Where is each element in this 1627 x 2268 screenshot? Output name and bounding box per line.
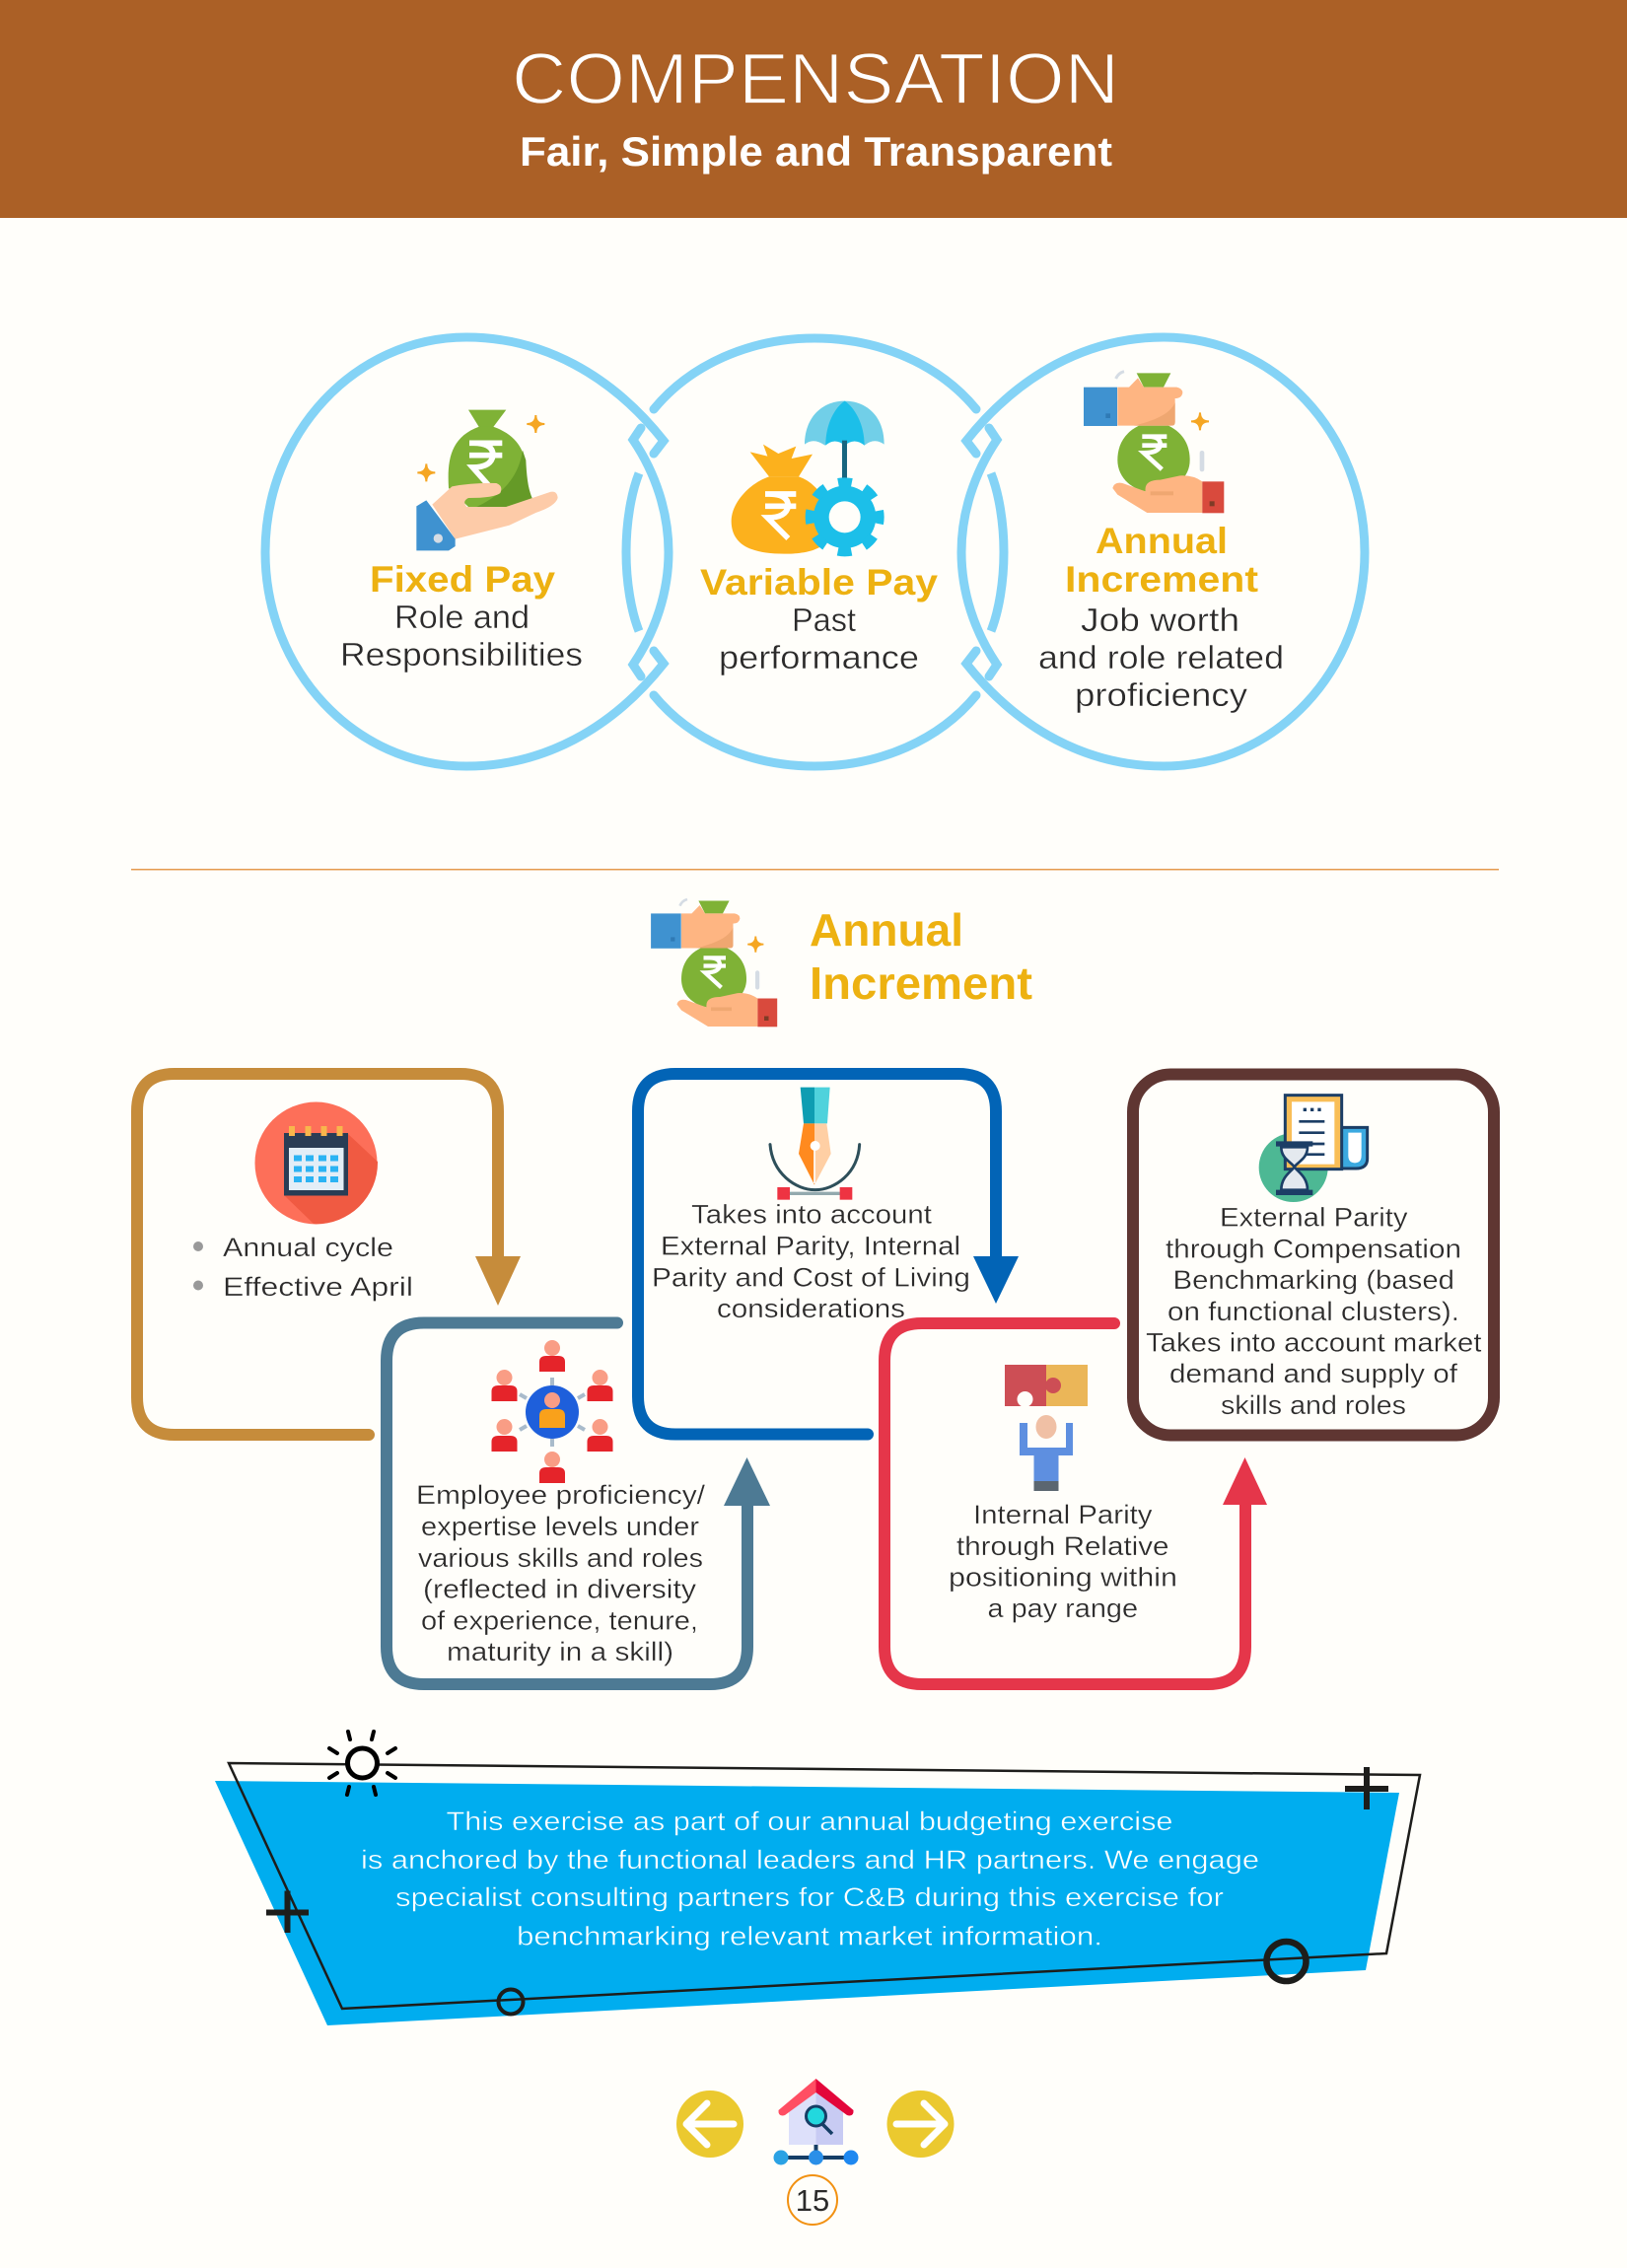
icon: hand holding money bag: [416, 410, 558, 550]
external parity text: through Compensation: [1166, 1235, 1461, 1264]
external parity text: Benchmarking (based: [1173, 1265, 1454, 1295]
bullets: [193, 1233, 413, 1302]
fixed pay text: [340, 559, 583, 673]
interlocked pay component rings: [265, 337, 1365, 766]
proficiency text: of experience, tenure,: [421, 1605, 698, 1635]
plus marks and rings: [266, 1767, 1388, 2014]
variable pay text: [700, 562, 938, 675]
external parity text: demand and supply of: [1169, 1359, 1458, 1388]
external parity text: [1146, 1203, 1482, 1420]
callout text: specialist consulting partners for C&B during this exercise for: [395, 1882, 1224, 1912]
ring: variable pay: [626, 338, 1004, 766]
proficiency text: Employee proficiency/: [416, 1480, 706, 1510]
icon: home: [773, 2079, 858, 2165]
title: COMPENSATION: [512, 39, 1119, 119]
callout text: is anchored by the functional leaders and HR partners. We engage: [361, 1845, 1259, 1875]
variable pay text: Variable Pay: [700, 562, 938, 602]
considerations text: considerations: [717, 1294, 905, 1323]
icon: annual increment heading: [651, 899, 777, 1027]
icon: money bag, umbrella and gear: [732, 401, 884, 554]
panel: internal parity: [884, 1323, 1267, 1684]
icon: calendar: [254, 1102, 378, 1225]
annual increment text: proficiency: [1075, 676, 1248, 713]
icon: person holding puzzle: [1005, 1365, 1088, 1491]
external parity text: External Parity: [1220, 1203, 1408, 1233]
arrow: blue frame: [638, 1074, 996, 1434]
icon: pen nib: [770, 1088, 860, 1200]
external parity text: skills and roles: [1221, 1390, 1406, 1420]
arrow: red frame: [884, 1323, 1245, 1684]
considerations text: External Parity, Internal: [661, 1231, 960, 1260]
proficiency text: (reflected in diversity: [423, 1574, 697, 1603]
icon: next arrow: [887, 2091, 955, 2158]
annual increment text: Annual: [1096, 521, 1228, 561]
icon: people network: [491, 1340, 613, 1483]
arrow: tan frame into proficiency: [137, 1074, 498, 1435]
callout text: [361, 1807, 1259, 1950]
proficiency text: expertise levels under: [421, 1512, 699, 1541]
proficiency text: [416, 1480, 706, 1666]
annual increment text: and role related: [1038, 639, 1284, 675]
callout text: This exercise as part of our annual budgeting exercise: [446, 1807, 1173, 1836]
panel: employee proficiency: [387, 1323, 770, 1684]
proficiency text: maturity in a skill): [447, 1637, 673, 1666]
fixed pay text: Fixed Pay: [370, 559, 555, 600]
internal parity text: Internal Parity: [973, 1500, 1153, 1529]
arrow: teal frame: [387, 1323, 747, 1684]
annual increment text: Increment: [1065, 559, 1258, 600]
icon: previous arrow: [676, 2091, 743, 2158]
bullets: Annual cycle: [223, 1233, 393, 1262]
variable pay text: Past: [792, 602, 856, 638]
internal parity text: [949, 1500, 1177, 1623]
considerations text: Parity and Cost of Living: [652, 1262, 970, 1292]
annual increment text: Job worth: [1081, 602, 1239, 638]
considerations text: [652, 1199, 970, 1323]
fixed pay text: Responsibilities: [340, 636, 583, 673]
fixed pay text: Role and: [394, 599, 530, 635]
internal parity text: through Relative: [956, 1531, 1169, 1561]
icon: document and hourglass: [1259, 1096, 1368, 1202]
icon: sun decoration: [329, 1732, 395, 1795]
header banner: [0, 0, 1627, 218]
annual increment heading: [810, 904, 1032, 1009]
ring: annual increment: [961, 337, 1365, 766]
panel: external parity: [1133, 1075, 1494, 1436]
annual increment text: [1038, 521, 1284, 713]
external parity text: Takes into account market: [1146, 1327, 1482, 1357]
icon: hands passing money bag: [1084, 372, 1224, 513]
proficiency text: various skills and roles: [418, 1543, 703, 1573]
panel: considerations: [638, 1074, 1019, 1434]
annual increment heading: Increment: [810, 957, 1032, 1009]
callout: budgeting note: [215, 1732, 1420, 2025]
page number: 15: [796, 2183, 829, 2218]
subtitle: Fair, Simple and Transparent: [520, 128, 1112, 175]
callout text: benchmarking relevant market information.: [517, 1921, 1102, 1950]
brown frame: [1133, 1075, 1494, 1436]
considerations text: Takes into account: [691, 1199, 933, 1229]
ring: fixed pay: [265, 337, 669, 766]
page number: [788, 2175, 837, 2225]
external parity text: on functional clusters).: [1167, 1297, 1459, 1326]
internal parity text: positioning within: [949, 1562, 1177, 1592]
annual increment heading: Annual: [810, 904, 963, 956]
internal parity text: a pay range: [988, 1594, 1138, 1623]
bullets: Effective April: [223, 1272, 413, 1302]
panel: annual cycle: [137, 1074, 521, 1435]
variable pay text: performance: [719, 639, 919, 675]
